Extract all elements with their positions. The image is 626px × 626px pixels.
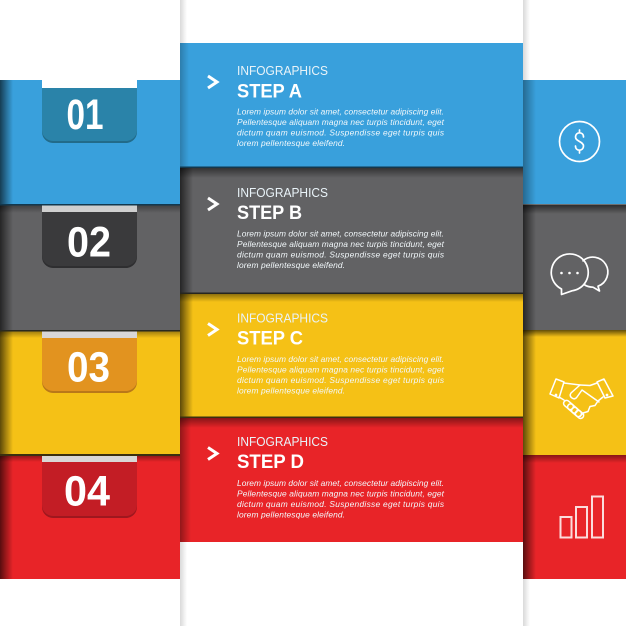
step A text <box>237 64 445 148</box>
step C text: dictum quam euismod. Suspendisse eget turpis quis <box>237 375 445 385</box>
number tab 04: 04 <box>64 468 110 516</box>
icon: handshake <box>550 379 613 420</box>
icon: speech bubbles <box>551 254 608 294</box>
arrow A <box>208 76 217 88</box>
step B text: Pellentesque aliquam magna nec turpis tincidunt, eget <box>237 239 445 249</box>
panel: left column band 04 red <box>0 455 180 579</box>
panel: step C yellow <box>180 294 523 418</box>
step C text: Lorem ipsum dolor sit amet, consectetur adipiscing elit. <box>237 354 444 364</box>
step D text <box>237 435 445 520</box>
number tab 02 <box>42 212 137 268</box>
panel: step D red <box>180 418 523 542</box>
step B text: lorem pellentesque eleifend. <box>237 260 345 270</box>
step C text: STEP C <box>237 328 303 350</box>
panel: left column band 02 gray <box>0 205 180 331</box>
number tab 04 <box>42 462 137 518</box>
number tab 01: 01 <box>66 91 104 139</box>
panel: left column band 03 yellow <box>0 331 180 455</box>
step B text: INFOGRAPHICS <box>237 186 328 200</box>
number tab 01 <box>42 88 137 143</box>
step A text: Pellentesque aliquam magna nec turpis tincidunt, eget <box>237 117 445 127</box>
step A text: STEP A <box>237 82 302 102</box>
step D text: dictum quam euismod. Suspendisse eget turpis quis <box>237 499 445 509</box>
step B text: STEP B <box>237 203 302 224</box>
panel: left column band 01 blue <box>0 80 180 205</box>
icon: bar chart <box>560 496 603 538</box>
step C text: Pellentesque aliquam magna nec turpis tincidunt, eget <box>237 364 445 374</box>
step D text: lorem pellentesque eleifend. <box>237 510 345 520</box>
step A text: lorem pellentesque eleifend. <box>237 138 345 148</box>
arrow C <box>208 324 217 336</box>
panel: right column bands <box>523 80 626 579</box>
step A text: Lorem ipsum dolor sit amet, consectetur adipiscing elit. <box>237 106 444 116</box>
step C text: lorem pellentesque eleifend. <box>237 386 345 396</box>
step B text: Lorem ipsum dolor sit amet, consectetur adipiscing elit. <box>237 228 444 238</box>
step C text: INFOGRAPHICS <box>237 312 328 326</box>
number tab 02: 02 <box>67 218 111 266</box>
step D text: Lorem ipsum dolor sit amet, consectetur adipiscing elit. <box>237 478 444 488</box>
arrow D <box>208 448 217 460</box>
shadow under gray band <box>0 330 180 332</box>
arrow B <box>208 198 217 210</box>
shadow under yellow band <box>0 454 180 456</box>
number tab 03 <box>42 338 137 393</box>
shadow under blue band <box>0 204 180 206</box>
number tab 03: 03 <box>67 344 110 392</box>
step D text: Pellentesque aliquam magna nec turpis tincidunt, eget <box>237 488 445 498</box>
step D text: STEP D <box>237 452 304 473</box>
step A text: dictum quam euismod. Suspendisse eget turpis quis <box>237 128 445 138</box>
panel: step A blue <box>180 43 523 168</box>
step B text <box>237 186 445 270</box>
step A text: INFOGRAPHICS <box>237 64 328 78</box>
step B text: dictum quam euismod. Suspendisse eget turpis quis <box>237 250 445 260</box>
step D text: INFOGRAPHICS <box>237 435 328 449</box>
icon: dollar coin <box>560 122 600 162</box>
step C text <box>237 312 445 396</box>
panel: step B gray <box>180 168 523 294</box>
